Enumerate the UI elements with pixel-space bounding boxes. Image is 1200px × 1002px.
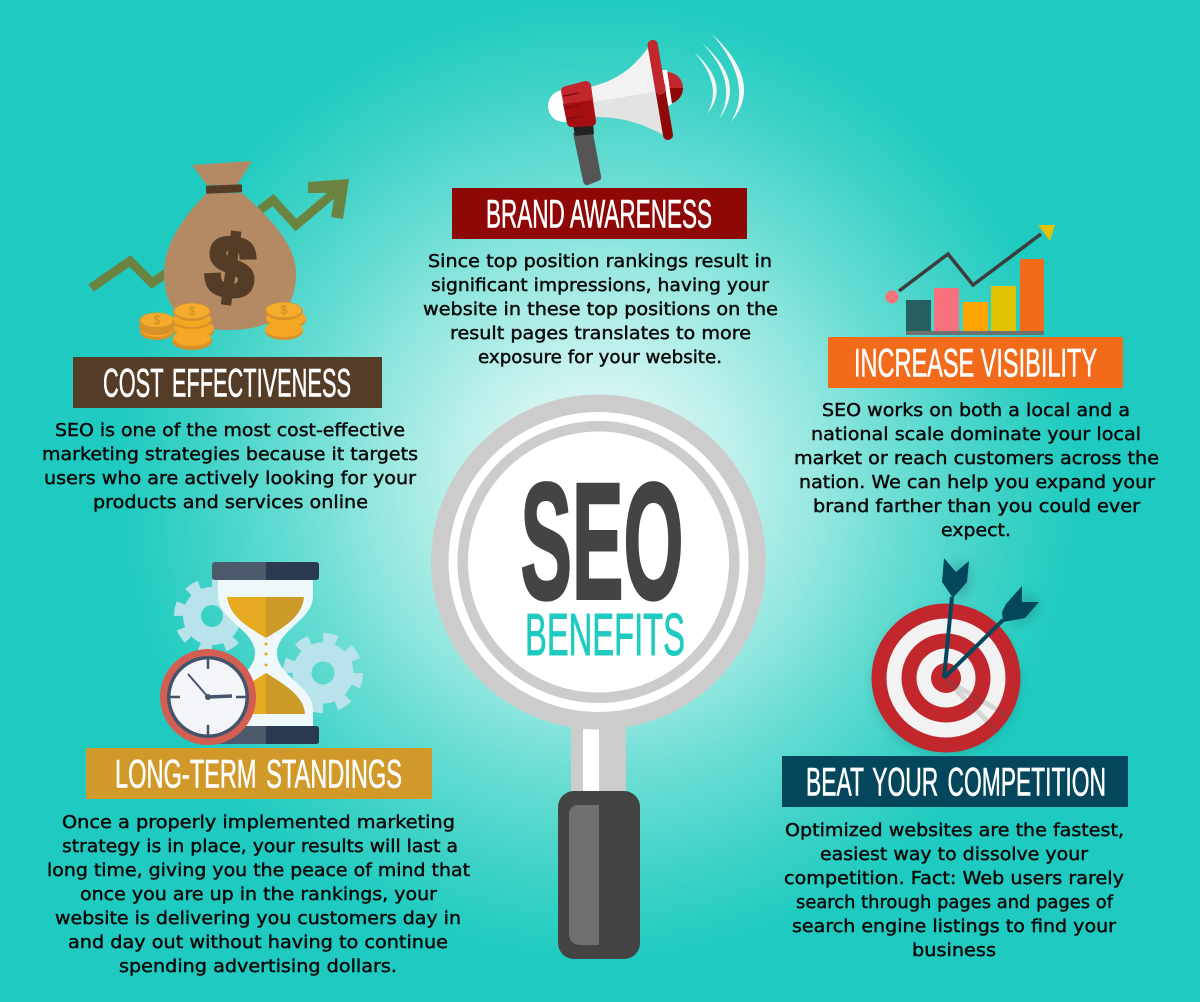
text: long-term standings: spending advertising dollars. — [119, 957, 397, 977]
subtitle: BENEFITS: BENEFITS — [525, 602, 685, 668]
icon: money bag with arrow: $ — [154, 313, 161, 327]
icon: money bag with arrow: $ — [281, 303, 288, 317]
icon: hourglass, gears and clock — [160, 562, 357, 745]
text: long-term standings: strategy is in place, your results will last a — [62, 837, 458, 857]
text: long-term standings: and day out without having to continue — [68, 933, 448, 953]
text: cost effectiveness: marketing strategies because it targets — [42, 445, 418, 465]
glass handle — [558, 791, 640, 959]
icon: money bag with arrow: $ — [189, 304, 196, 318]
text: increase visibility: SEO works on both a local and a — [822, 401, 1130, 421]
text: increase visibility: brand farther than you could ever — [813, 497, 1141, 517]
text: beat your competition: search through pages and pages of — [796, 893, 1114, 913]
heading banner: cost effectiveness: COST EFFECTIVENESS — [103, 362, 351, 406]
text: long-term standings — [47, 813, 470, 977]
heading banner: increase visibility — [828, 337, 1123, 388]
heading banner: brand awareness — [452, 188, 747, 239]
text: increase visibility: nation. We can help you expand your — [799, 473, 1156, 493]
text: long-term standings: Once a properly implemented marketing — [62, 813, 455, 833]
panel: long-term standings — [47, 562, 470, 977]
text: long-term standings: website is delivering you customers day in — [55, 909, 461, 929]
icon: megaphone — [548, 34, 744, 185]
text: beat your competition: Optimized websites are the fastest, — [785, 821, 1124, 841]
text: beat your competition: competition. Fact: Web users rarely — [784, 869, 1124, 889]
text: brand awareness: website in these top positions on the — [423, 300, 778, 320]
icon: target with arrows — [872, 558, 1042, 756]
text: beat your competition: business — [912, 941, 996, 961]
icon: money bag with arrow: $ — [201, 217, 261, 317]
text: increase visibility: market or reach customers across the — [794, 449, 1159, 469]
text: brand awareness: significant impressions, having your — [431, 276, 770, 296]
icon: bar chart with trend line — [886, 225, 1055, 335]
heading banner: long-term standings: LONG-TERM STANDINGS — [115, 752, 402, 796]
panel: cost effectiveness — [42, 161, 418, 513]
text: long-term standings: once you are up in the rankings, your — [80, 885, 438, 905]
magnifying glass: SEO — [520, 450, 684, 634]
heading banner: brand awareness: BRAND AWARENESS — [486, 192, 712, 236]
text: cost effectiveness: SEO is one of the most cost-effective — [55, 421, 405, 441]
text: brand awareness — [423, 252, 778, 368]
heading banner: beat your competition — [782, 756, 1128, 807]
heading banner: cost effectiveness — [73, 357, 382, 408]
text: beat your competition: search engine listings to find your — [792, 917, 1117, 937]
magnifying glass — [431, 394, 766, 959]
text: brand awareness: exposure for your website. — [478, 348, 722, 368]
panel: increase visibility — [794, 225, 1159, 541]
text: beat your competition — [784, 821, 1124, 961]
text: increase visibility: national scale dominate your local — [811, 425, 1141, 445]
text: cost effectiveness — [42, 421, 418, 513]
panel: brand awareness — [423, 34, 778, 368]
text: cost effectiveness: products and services online — [93, 493, 368, 513]
text: beat your competition: easiest way to dissolve your — [820, 845, 1089, 865]
text: long-term standings: long time, giving you the peace of mind that — [47, 861, 470, 881]
text: increase visibility — [794, 401, 1159, 541]
glass lens — [431, 394, 766, 730]
icon: money bag with arrow — [91, 161, 349, 350]
heading banner: long-term standings — [86, 748, 432, 799]
text: brand awareness: result pages translates to more — [450, 324, 751, 344]
text: cost effectiveness: users who are actively looking for your — [44, 469, 417, 489]
glass stem — [571, 715, 626, 795]
text: brand awareness: Since top position rankings result in — [428, 252, 772, 272]
text: increase visibility: expect. — [941, 521, 1011, 541]
panel: beat your competition — [782, 558, 1128, 961]
